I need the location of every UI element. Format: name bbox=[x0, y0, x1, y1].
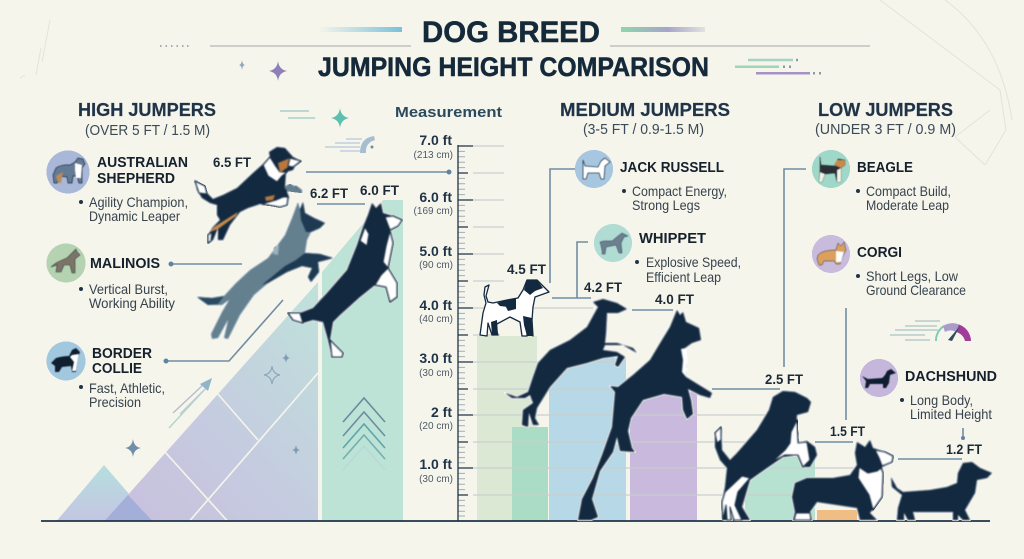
dog: whippet bbox=[505, 299, 637, 427]
small triangle bbox=[57, 465, 152, 520]
connector: dachshund bbox=[898, 428, 963, 459]
name: shepherd: SHEPHERD bbox=[97, 171, 175, 187]
dog: boxer bbox=[578, 310, 712, 520]
sparkle: outline bbox=[264, 366, 280, 384]
connector: 6.5 ft to scale bbox=[306, 171, 449, 173]
dog: australian shepherd jumping bbox=[195, 147, 302, 243]
name: beagle: BEAGLE bbox=[857, 160, 913, 176]
description: Ground Clearance bbox=[866, 283, 966, 298]
description: Short Legs, Low bbox=[866, 269, 958, 284]
bullet bbox=[79, 200, 83, 204]
title decoration: left bar bbox=[318, 27, 402, 32]
panel: low jumpers bbox=[812, 100, 997, 422]
icon: whippet bbox=[594, 224, 632, 262]
description: Fast, Athletic, bbox=[89, 381, 165, 396]
upward arrow lines bbox=[169, 378, 212, 428]
title line 2: JUMPING HEIGHT COMPARISON bbox=[318, 52, 709, 82]
name: whippet: WHIPPET bbox=[639, 231, 706, 247]
tick label: 5.0 ft: 5.0 ft bbox=[419, 243, 452, 259]
name: malinois: MALINOIS bbox=[90, 256, 160, 272]
description: Strong Legs bbox=[632, 198, 700, 213]
sparkle: blue bbox=[125, 439, 141, 457]
gridlines bbox=[473, 146, 880, 495]
measurement axis bbox=[395, 104, 880, 521]
dog: malinois jumping bbox=[197, 202, 333, 339]
icon: speed gauge bbox=[890, 321, 971, 341]
tick unit: 30 cm: (30 cm) bbox=[419, 368, 453, 379]
dog: beagle bbox=[715, 391, 817, 520]
description: Compact Energy, bbox=[632, 184, 727, 199]
panel: high jumpers bbox=[46, 100, 216, 410]
icon: australian shepherd bbox=[46, 150, 90, 194]
tick unit: 90 cm: (90 cm) bbox=[419, 260, 453, 271]
label: 4.2 ft: 4.2 FT bbox=[584, 280, 623, 295]
label: 2.5 ft: 2.5 FT bbox=[765, 372, 804, 387]
icon: dachshund bbox=[860, 359, 898, 397]
ramp dividers bbox=[165, 373, 318, 520]
title decoration: rules bbox=[210, 45, 870, 47]
label: 4.0 ft: 4.0 FT bbox=[655, 292, 695, 307]
bullet bbox=[856, 274, 860, 278]
description: Agility Champion, bbox=[89, 195, 188, 210]
title bbox=[160, 16, 870, 82]
sparkles: small bbox=[282, 353, 300, 455]
connector: beagle bbox=[712, 169, 806, 389]
name: australian shepherd: AUSTRALIAN bbox=[97, 155, 188, 171]
description: Moderate Leap bbox=[866, 198, 949, 213]
icon: malinois bbox=[46, 244, 86, 282]
connector: 6.2 ft bbox=[317, 203, 365, 205]
connector: whippet bbox=[577, 242, 588, 298]
dog: corgi bbox=[792, 440, 893, 520]
tick unit: 20 cm: (20 cm) bbox=[419, 421, 453, 432]
description: Long Body, bbox=[910, 393, 973, 408]
name: corgi: CORGI bbox=[857, 245, 902, 261]
baseline bbox=[41, 520, 990, 522]
axis title: Measurement bbox=[395, 104, 502, 121]
bar: low mint bbox=[745, 457, 815, 520]
connector: boxer bbox=[632, 309, 673, 311]
tick unit: 169 cm: (169 cm) bbox=[414, 206, 453, 217]
bar: orange under corgi bbox=[817, 510, 857, 520]
bullet bbox=[635, 260, 639, 264]
subheading: (UNDER 3 FT / 0.9 M) bbox=[815, 122, 956, 138]
icon: border collie bbox=[46, 342, 86, 380]
connector: corgi bbox=[815, 308, 853, 442]
bar: mint bbox=[512, 427, 548, 520]
major ticks and axis line bbox=[458, 145, 473, 521]
name: border: BORDER bbox=[92, 346, 152, 362]
icon: corgi bbox=[812, 235, 850, 273]
connector lines bbox=[164, 169, 963, 459]
tick label: 6.0 ft: 6.0 ft bbox=[419, 189, 452, 205]
tick label: 3.0 ft: 3.0 ft bbox=[419, 350, 452, 366]
connector dots bbox=[164, 170, 452, 364]
connector: jack russell bbox=[550, 169, 591, 298]
dog: jack russell bbox=[480, 280, 549, 336]
heading: MEDIUM JUMPERS bbox=[560, 100, 730, 120]
title decoration: purple sparkle bbox=[269, 61, 287, 81]
title decoration: right bar bbox=[621, 27, 705, 32]
title decoration: small sparkle bbox=[239, 60, 245, 70]
tick label: 7.0 ft: 7.0 ft bbox=[419, 132, 452, 148]
title decoration: speed lines bbox=[735, 60, 821, 73]
name: dachshund: DACHSHUND bbox=[905, 369, 997, 385]
title decoration: dots bbox=[160, 45, 188, 47]
large ramp bbox=[105, 282, 318, 520]
name: collie: COLLIE bbox=[92, 361, 142, 377]
name: jack russell: JACK RUSSELL bbox=[620, 160, 724, 176]
tick unit: 30 cm: (30 cm) bbox=[419, 474, 453, 485]
label: 6.5 ft: 6.5 FT bbox=[213, 155, 252, 170]
minor ticks bbox=[458, 151, 465, 516]
bar: lavender bbox=[630, 387, 697, 520]
bar: blue bbox=[549, 358, 626, 520]
label: 4.5 ft: 4.5 FT bbox=[507, 262, 547, 277]
triangle overlap bbox=[105, 495, 152, 520]
tick label: 2 ft: 2 ft bbox=[431, 404, 452, 420]
connector: malinois bbox=[171, 263, 242, 265]
tick unit: 213 cm: (213 cm) bbox=[414, 150, 453, 161]
chart area: staircase bars bbox=[57, 200, 857, 520]
description: Explosive Speed, bbox=[646, 255, 741, 270]
subheading: (OVER 5 FT / 1.5 M) bbox=[85, 123, 210, 139]
bar: light green bbox=[477, 336, 537, 520]
description: Efficient Leap bbox=[646, 270, 721, 285]
dog: dachshund bbox=[891, 462, 992, 520]
label: 1.2 ft: 1.2 FT bbox=[946, 442, 983, 457]
bullet bbox=[79, 287, 83, 291]
panel: medium jumpers bbox=[560, 100, 741, 285]
description: Dynamic Leaper bbox=[89, 209, 180, 224]
label: 6.0 ft: 6.0 FT bbox=[360, 183, 400, 198]
icon: jack russell bbox=[575, 150, 613, 188]
description: Vertical Burst, bbox=[89, 282, 168, 297]
description: Working Ability bbox=[89, 296, 175, 311]
bullet bbox=[622, 189, 626, 193]
bullet bbox=[79, 385, 83, 389]
description: Compact Build, bbox=[866, 184, 951, 199]
description: Precision bbox=[89, 395, 141, 410]
connector dot: dachshund bbox=[961, 436, 965, 440]
tall mint column bbox=[322, 200, 403, 520]
floating sparkle and speed decoration bbox=[280, 108, 375, 153]
subheading: (3-5 FT / 0.9-1.5 M) bbox=[583, 122, 704, 138]
description: Limited Height bbox=[910, 407, 992, 422]
tick label: 1.0 ft: 1.0 ft bbox=[419, 456, 452, 472]
heading: LOW JUMPERS bbox=[818, 100, 953, 120]
bullet bbox=[900, 398, 904, 402]
connector: border collie bbox=[166, 300, 283, 361]
bullet bbox=[856, 189, 860, 193]
label: 6.2 ft: 6.2 FT bbox=[310, 186, 349, 201]
label: 1.5 ft: 1.5 FT bbox=[830, 424, 866, 439]
icon: beagle bbox=[812, 150, 850, 188]
chevrons bbox=[343, 398, 385, 422]
dog: border collie standing jump bbox=[288, 203, 402, 357]
heading: HIGH JUMPERS bbox=[78, 100, 216, 120]
tick label: 4.0 ft: 4.0 ft bbox=[419, 297, 452, 313]
tick unit: 40 cm: (40 cm) bbox=[419, 314, 453, 325]
title line 1: DOG BREED bbox=[422, 16, 600, 49]
